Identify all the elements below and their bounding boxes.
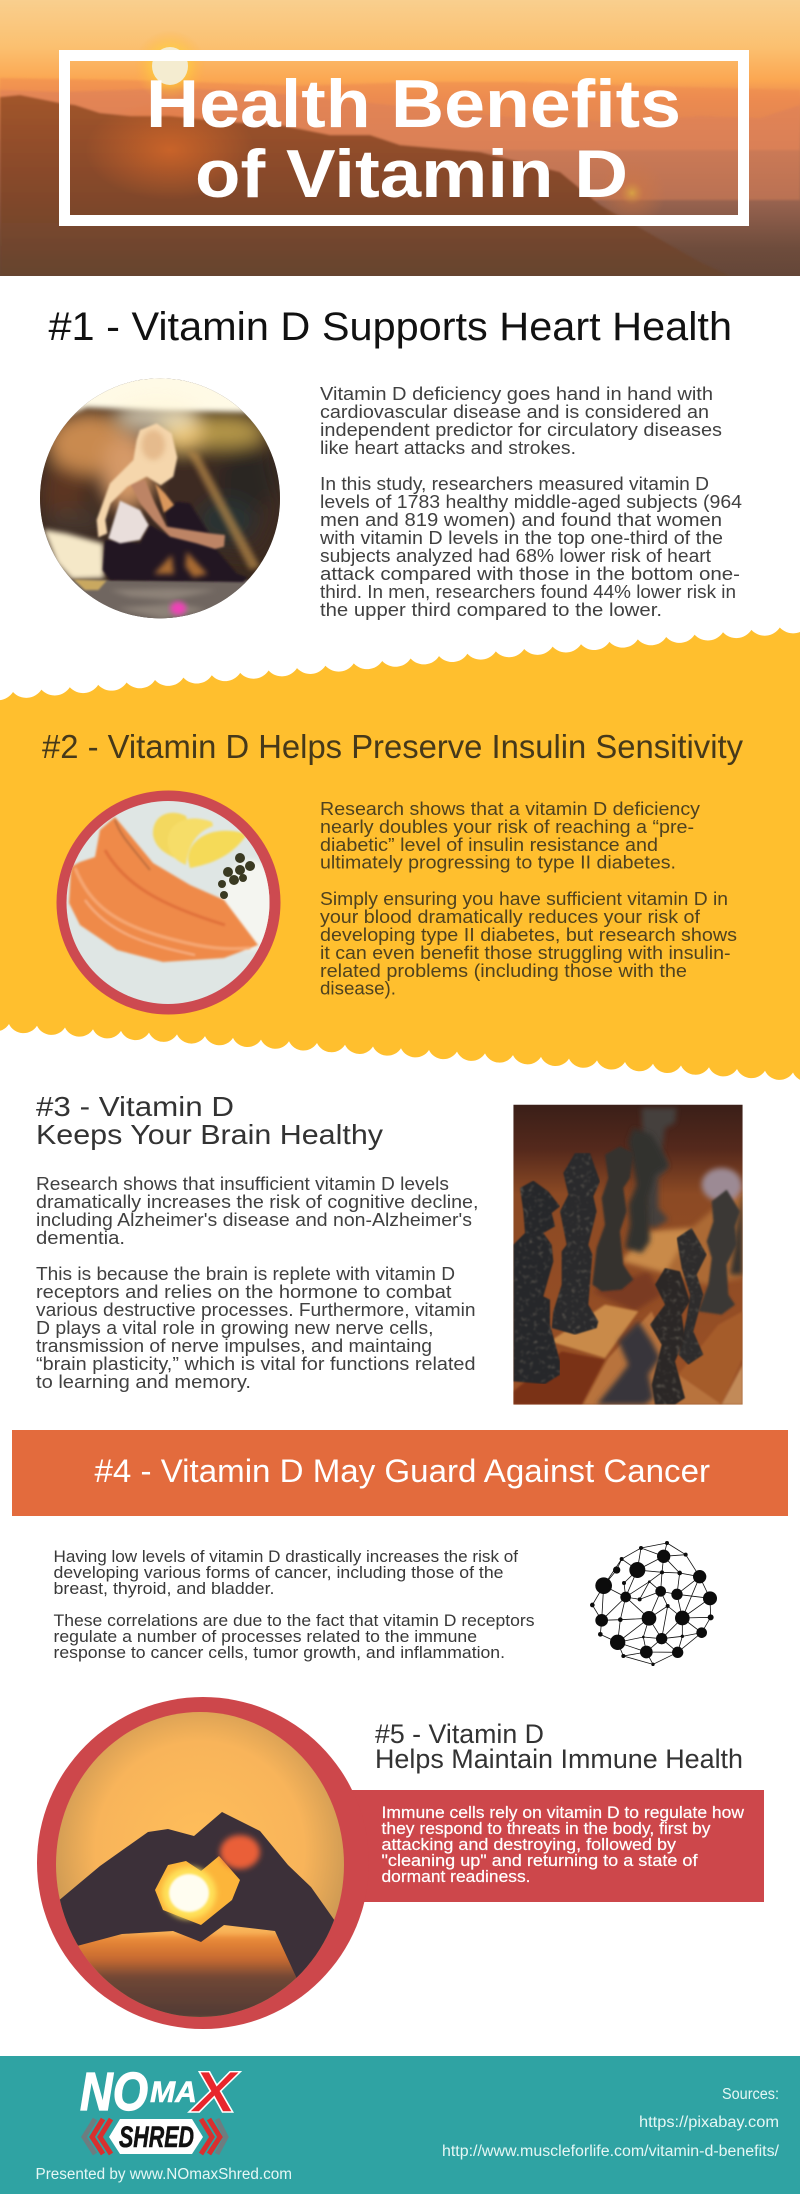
text: section 3 [36, 1174, 478, 1392]
heading: section 3: #3 - Vitamin D [36, 1091, 234, 1122]
panel: footer [0, 2056, 800, 2194]
text: section 2: your blood dramatically reduces your risk of [320, 907, 701, 927]
text: section 1: independent predictor for circulatory diseases [320, 420, 722, 440]
text: section 5: attacking and destroying, followed by [382, 1836, 677, 1854]
text: section 3: various destructive processes. Furthermore, vitamin [36, 1300, 476, 1320]
text: section 1: the upper third compared to the lower. [320, 600, 662, 620]
text: section 2: related problems (including those with the [320, 961, 687, 981]
logo: NO MAX SHRED: X [189, 2060, 241, 2125]
text: section 3: “brain plasticity,” which is vital for functions related [36, 1354, 476, 1374]
panel: yellow scalloped band [0, 623, 800, 1083]
text: section 4 [54, 1548, 534, 1662]
text: section 2: nearly doubles your risk of reaching a “pre- [320, 817, 694, 837]
text: section 2: developing type II diabetes, but research shows [320, 925, 737, 945]
logo: NO MAX SHRED: NO [80, 2062, 148, 2122]
photo: heart hands at sunset in red ring [37, 1697, 369, 2029]
photo: salmon plate in red ring [56, 790, 280, 1014]
text: section 3: This is because the brain is replete with vitamin D [36, 1264, 455, 1284]
text: section 4: breast, thyroid, and bladder. [54, 1580, 274, 1598]
text: section 3: to learning and memory. [36, 1372, 251, 1392]
text: section 4: These correlations are due to the fact that vitamin D receptors [54, 1612, 534, 1630]
photo: woman sitting at sunset [40, 378, 280, 618]
title frame [64, 56, 744, 220]
title: of Vitamin D [195, 136, 628, 212]
text: section 3: including Alzheimer's disease and non-Alzheimer's [36, 1210, 472, 1230]
text: section 1: Vitamin D deficiency goes hand in hand with [320, 384, 713, 404]
text: section 2: ultimately progressing to type II diabetes. [320, 852, 676, 872]
text: section 1: third. In men, researchers found 44% lower risk in [320, 582, 736, 602]
logo: NO MAX SHRED: SHRED [119, 2121, 194, 2154]
text: section 3: Research shows that insufficient vitamin D levels [36, 1174, 449, 1194]
text: section 2: Research shows that a vitamin D deficiency [320, 799, 700, 819]
text: section 1: with vitamin D levels in the top one-third of the [319, 528, 723, 548]
text: section 1: men and 819 women) and found that women [320, 510, 722, 530]
photo: chess pieces on a board [513, 1105, 743, 1405]
heading: section 5 [375, 1719, 743, 1774]
text: section 5: dormant readiness. [382, 1868, 530, 1886]
text: section 3: D plays a vital role in growing new nerve cells, [36, 1318, 434, 1338]
title: Health Benefits [146, 66, 681, 142]
panel: section 5 text box [340, 1790, 764, 1902]
heading: section 4: #4 - Vitamin D May Guard Against Cancer [94, 1453, 710, 1489]
text: presented by: Presented by www.NOmaxShred.com [36, 2166, 292, 2183]
text: section 1: subjects analyzed had 68% lower risk of heart [320, 546, 711, 566]
text: sources [442, 2086, 780, 2160]
text: section 1: like heart attacks and strokes. [320, 438, 576, 458]
logo: NO MAX SHRED [80, 2060, 241, 2154]
text: section 2 [320, 799, 737, 998]
text: section 1: In this study, researchers measured vitamin D [320, 474, 709, 494]
text: section 4: regulate a number of processes related to the immune [54, 1628, 477, 1646]
text: section 2: it can even benefit those struggling with insulin- [320, 943, 731, 963]
heading: section 5: #5 - Vitamin D [375, 1719, 544, 1749]
icon: node network [590, 1541, 717, 1666]
text: section 2: diabetic” level of insulin resistance and [320, 835, 658, 855]
panel: section 4 heading bar [12, 1430, 788, 1516]
heading: section 5: Helps Maintain Immune Health [375, 1744, 743, 1774]
text: section 1 [319, 384, 742, 620]
text: section 2: Simply ensuring you have sufficient vitamin D in [320, 889, 728, 909]
text: section 1: attack compared with those in the bottom one- [320, 564, 740, 584]
text: sources: Sources: [722, 2086, 779, 2103]
text: sources: https://pixabay.com [639, 2114, 779, 2131]
heading: section 2: #2 - Vitamin D Helps Preserve Insulin Sensitivity [42, 728, 743, 765]
text: section 4: Having low levels of vitamin D drastically increases the risk of [54, 1548, 518, 1566]
text: sources: http://www.muscleforlife.com/vitamin-d-benefits/ [442, 2143, 780, 2160]
header banner: sunset over mountains [0, 0, 800, 276]
text: section 2: disease). [320, 978, 396, 998]
text: section 5 [382, 1804, 744, 1886]
text: section 5: Immune cells rely on vitamin D to regulate how [382, 1804, 744, 1822]
heading: section 1: #1 - Vitamin D Supports Heart Health [48, 305, 732, 349]
title [150, 78, 678, 198]
heading: section 3: Keeps Your Brain Healthy [36, 1119, 383, 1150]
text: section 3: dramatically increases the risk of cognitive decline, [36, 1192, 478, 1212]
text: section 5: "cleaning up" and returning to a state of [382, 1852, 698, 1870]
text: section 1: levels of 1783 healthy middle-aged subjects (964 [320, 492, 742, 512]
text: section 3: dementia. [36, 1228, 125, 1248]
text: section 3: transmission of nerve impulses, and maintaing [36, 1336, 432, 1356]
text: section 4: developing various forms of cancer, including those of the [54, 1564, 504, 1582]
heading: section 3 [36, 1091, 383, 1150]
text: section 5: they respond to threats in the body, first by [382, 1820, 711, 1838]
text: section 4: response to cancer cells, tumor growth, and inflammation. [54, 1644, 505, 1662]
text: section 3: receptors and relies on the hormone to combat [36, 1282, 452, 1302]
logo: NO MAX SHRED: MA [150, 2076, 197, 2109]
text: section 1: cardiovascular disease and is considered an [320, 402, 709, 422]
